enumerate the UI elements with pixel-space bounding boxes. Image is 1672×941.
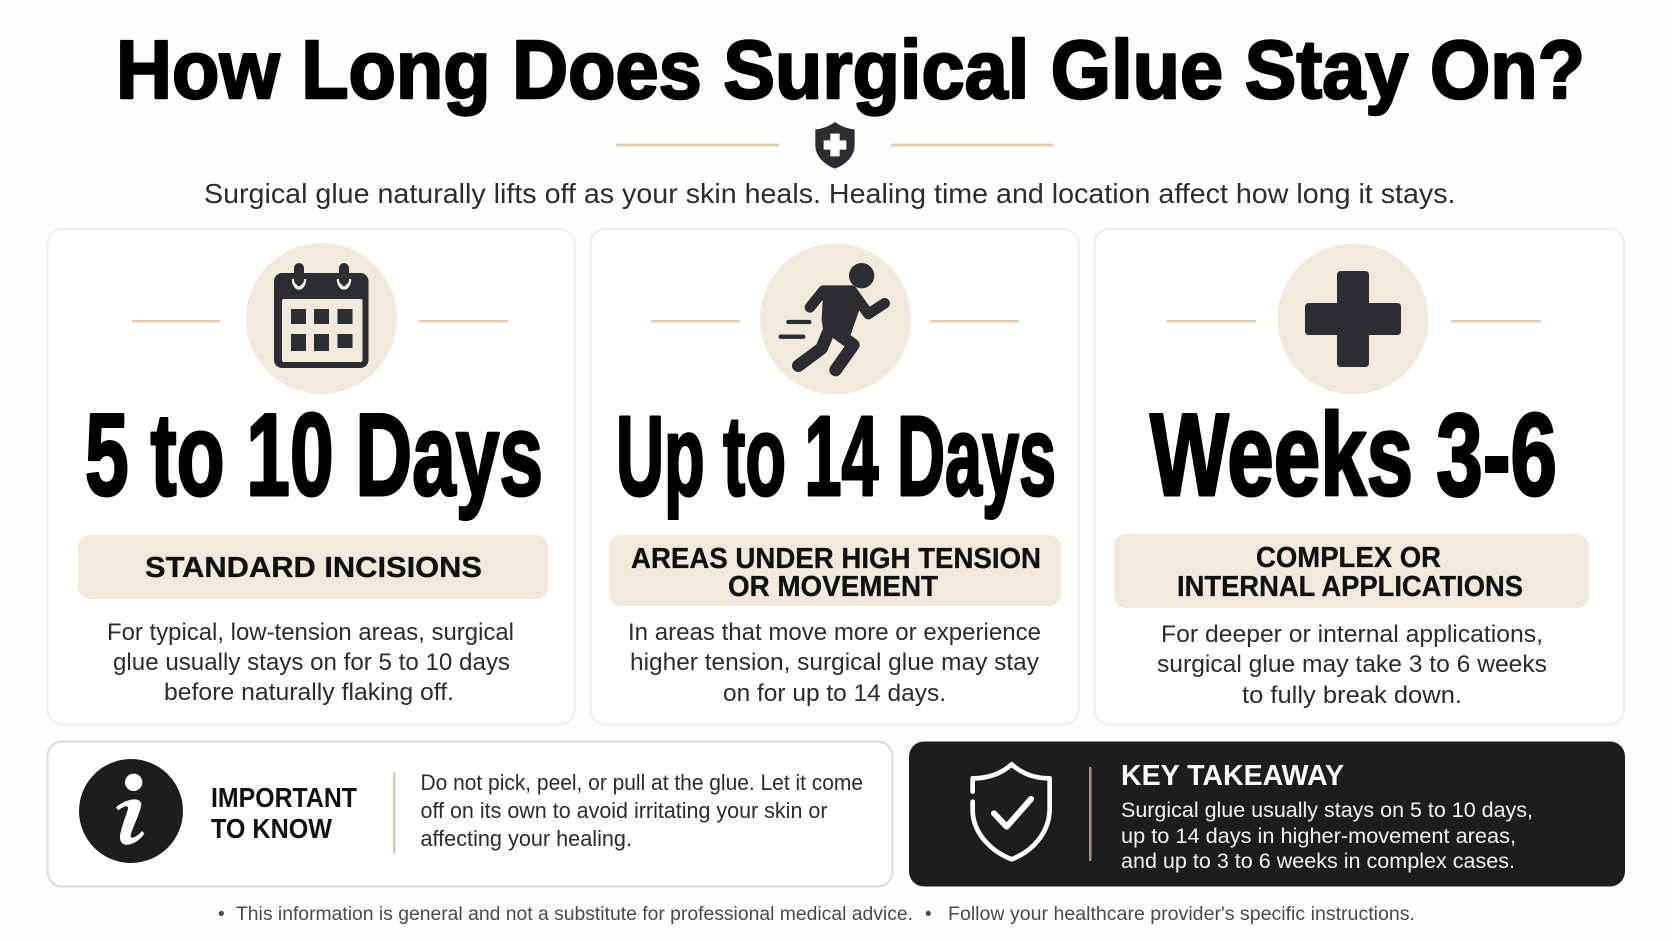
label pill: COMPLEX OR [1256,542,1441,574]
body text: up to 14 days in higher-movement areas, [1121,824,1516,848]
description: For typical, low-tension areas, surgical [107,619,514,646]
duration: up to 14 days: Up to 14 Days [616,393,1056,519]
icon: calendar [246,243,397,394]
description [628,619,1041,707]
label pill: AREAS UNDER HIGH TENSION [631,543,1041,575]
subtitle: Surgical glue naturally lifts off as your skin heals. Healing time and location affect how long it stays. [204,178,1456,209]
body text: Do not pick, peel, or pull at the glue. Let it come [420,770,863,795]
body text [1121,798,1533,873]
label pill [78,535,548,599]
heading: KEY TAKEAWAY [1121,760,1344,792]
icon: running person [760,244,911,394]
footer disclaimer: • [218,904,225,925]
description [107,619,514,706]
heading [211,782,357,844]
icon: shield check [973,764,1050,859]
duration: 5 to 10 days: 5 to 10 Days [85,389,543,520]
description: to fully break down. [1242,682,1462,709]
icon: information [79,759,183,863]
panel: standard incisions [48,229,574,724]
description: before naturally flaking off. [164,679,454,706]
footer disclaimer: This information is general and not a substitute for professional medical advice. [236,904,913,925]
panel: high tension areas [590,229,1078,724]
label pill [1114,534,1589,608]
panel: important to know [48,742,892,886]
title: How Long Does Surgical Glue Stay On? [116,23,1585,116]
label pill: STANDARD INCISIONS [145,552,482,584]
panel: complex or internal applications [1094,229,1624,724]
heading: TO KNOW [211,813,332,844]
description: higher tension, surgical glue may stay [630,649,1040,676]
header divider with shield icon [616,122,1053,169]
icon: medical cross [1278,244,1428,394]
body text: off on its own to avoid irritating your skin or [420,798,828,823]
footer disclaimer: Follow your healthcare provider's specific instructions. [948,904,1415,925]
description: For deeper or internal applications, [1161,621,1543,648]
label pill: OR MOVEMENT [728,571,939,603]
body text: Surgical glue usually stays on 5 to 10 days, [1121,798,1533,822]
description: glue usually stays on for 5 to 10 days [113,649,510,676]
description: In areas that move more or experience [628,619,1041,646]
icon: medical shield [815,122,855,169]
panel: key takeaway [909,742,1625,886]
heading: IMPORTANT [211,782,357,813]
footer disclaimer [218,904,1415,925]
body text [420,770,863,851]
label pill [609,535,1061,606]
body text: affecting your healing. [420,826,632,851]
body text: and up to 3 to 6 weeks in complex cases. [1121,849,1515,873]
description: on for up to 14 days. [723,680,946,707]
label pill: INTERNAL APPLICATIONS [1177,571,1523,603]
footer disclaimer: • [925,904,932,925]
description: surgical glue may take 3 to 6 weeks [1157,651,1547,678]
description [1157,621,1547,709]
